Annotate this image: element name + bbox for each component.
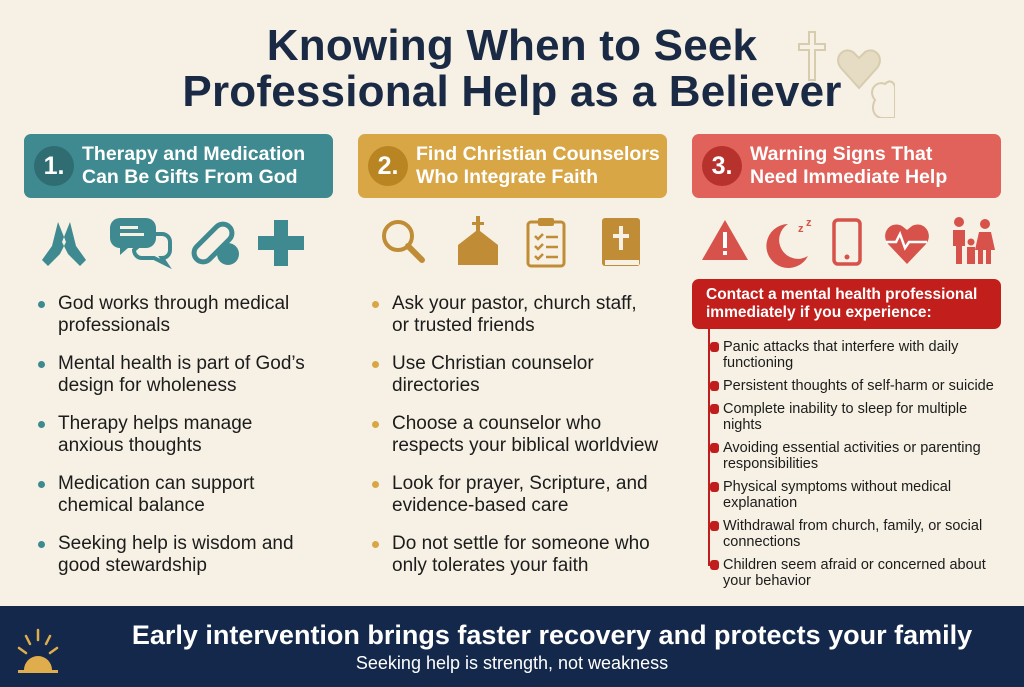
bullet list panel 2: directories [392, 375, 480, 396]
bullet list panel 1: Seeking help is wisdom and [58, 533, 294, 554]
panel 2 header: Find Christian Counselors [416, 143, 660, 165]
footer banner: Seeking help is strength, not weakness [356, 653, 668, 673]
title: Professional Help as a Believer [182, 67, 842, 116]
warning signs timeline [708, 329, 994, 589]
footer text: Early intervention brings faster recovery and protects your family [132, 620, 972, 650]
bullet list panel 1: professionals [58, 315, 170, 336]
bullet list panel 2 [372, 293, 658, 576]
warning signs timeline: Complete inability to sleep for multiple nights [723, 401, 967, 433]
bullet list panel 2: only tolerates your faith [392, 555, 588, 576]
bullet list panel 2: Choose a counselor who [392, 413, 601, 434]
icons panel 3: z [798, 223, 804, 235]
bullet list panel 2: Look for prayer, Scripture, and [392, 473, 648, 494]
warning signs timeline: Avoiding essential activities or parenting responsibilities [723, 440, 981, 472]
bullet list panel 1 [38, 293, 305, 576]
title [182, 21, 842, 116]
alert box: Contact a mental health professional [706, 286, 977, 303]
bullet list panel 1: Mental health is part of God’s [58, 353, 305, 374]
panel 3 header: Need Immediate Help [750, 166, 947, 188]
bullet list panel 2: Ask your pastor, church staff, [392, 293, 637, 314]
bullet list panel 1: God works through medical [58, 293, 289, 314]
panel 2 header: Who Integrate Faith [416, 166, 598, 188]
bullet list panel 2: Use Christian counselor [392, 353, 594, 374]
bullet list panel 1: Therapy helps manage [58, 413, 252, 434]
panel 3 header: Warning Signs That [750, 143, 932, 165]
panel 2 header [358, 134, 667, 198]
panel 1 header: Can Be Gifts From God [82, 166, 298, 188]
bullet list panel 1: design for wholeness [58, 375, 236, 396]
bullet list panel 1: chemical balance [58, 495, 205, 516]
alert box [692, 279, 1001, 329]
panel 1 header [24, 134, 333, 198]
panel 3 header: 3. [712, 152, 732, 180]
alert box: immediately if you experience: [706, 304, 932, 321]
icons panel 2 [382, 216, 640, 268]
panel 1 header: Therapy and Medication [82, 143, 305, 165]
bullet list panel 1: good stewardship [58, 555, 207, 576]
bullet list panel 2: Do not settle for someone who [392, 533, 650, 554]
panel 2 header: 2. [378, 152, 398, 180]
bullet list panel 2: evidence-based care [392, 495, 568, 516]
warning signs timeline: Physical symptoms without medical explanation [723, 479, 951, 511]
warning signs timeline: Children seem afraid or concerned about your behavior [723, 557, 986, 589]
icons panel 1 [42, 218, 304, 269]
icons panel 3: z [806, 217, 812, 229]
panel 3 header [692, 134, 1001, 198]
icon: sunrise [18, 628, 58, 673]
footer banner [0, 606, 1024, 687]
bullet list panel 2: respects your biblical worldview [392, 435, 658, 456]
bullet list panel 1: Medication can support [58, 473, 254, 494]
warning signs timeline: Persistent thoughts of self-harm or suicide [723, 378, 994, 394]
bullet list panel 2: or trusted friends [392, 315, 535, 336]
decorative icons: cross, heart, brain [798, 31, 895, 118]
icons panel 3 [702, 217, 995, 268]
warning signs timeline: Withdrawal from church, family, or social connections [723, 518, 982, 550]
title: Knowing When to Seek [267, 21, 757, 70]
warning signs timeline: Panic attacks that interfere with daily functioning [723, 339, 958, 371]
bullet list panel 1: anxious thoughts [58, 435, 202, 456]
panel 1 header: 1. [44, 152, 64, 180]
